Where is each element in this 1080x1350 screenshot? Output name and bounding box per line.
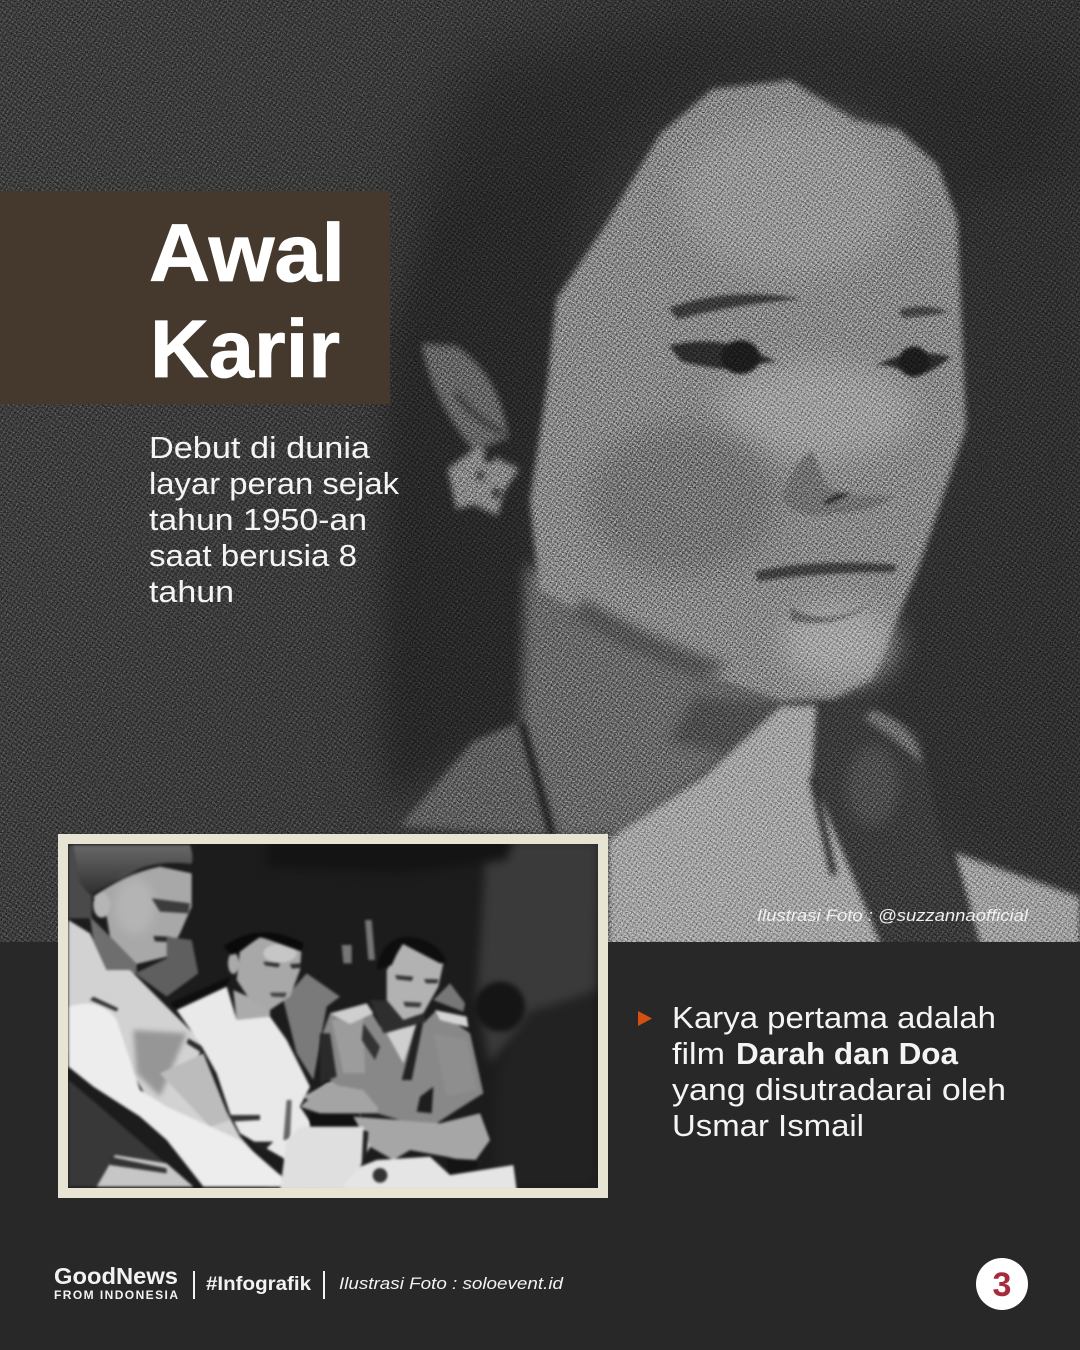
man on the left <box>68 845 300 1187</box>
bullet point: Usmar Ismail <box>672 1108 864 1143</box>
face <box>530 80 966 702</box>
hashtag: #Infografik <box>206 1274 311 1295</box>
man in the middle <box>172 932 340 1160</box>
intro text: tahun <box>149 574 234 609</box>
facial features <box>669 294 951 623</box>
page number badge <box>976 1258 1028 1310</box>
bottom dark panel <box>0 942 1080 1350</box>
halftone grain texture <box>0 0 1080 942</box>
footer <box>54 1263 564 1302</box>
left part of still <box>68 845 360 1187</box>
bullet point: Karya pertama adalah <box>672 1000 996 1035</box>
bullet point <box>638 1000 1006 1143</box>
papers on the table <box>280 1127 517 1190</box>
photo credit: Ilustrasi Foto : soloevent.id <box>339 1274 564 1293</box>
bullet point: Darah dan Doa <box>736 1036 959 1071</box>
portrait photo background <box>0 0 1080 946</box>
logo <box>54 1263 178 1302</box>
logo: FROM INDONESIA <box>54 1288 178 1302</box>
bullet point: yang disutradarai oleh <box>672 1072 1006 1107</box>
intro text: tahun 1950-an <box>149 502 367 537</box>
still background <box>274 844 598 1060</box>
title text <box>149 208 345 395</box>
collar and shirt <box>400 705 1080 946</box>
ear and earring <box>422 344 519 516</box>
hair mass <box>395 10 1080 780</box>
framed film still <box>58 834 608 1198</box>
portrait photo credit: Ilustrasi Foto : @suzzannaofficial <box>757 906 1029 925</box>
intro text: Debut di dunia <box>149 430 371 465</box>
face shading <box>678 116 903 277</box>
right part of still <box>280 920 525 1190</box>
dark hair behind neck <box>380 235 558 802</box>
neck <box>521 562 782 839</box>
intro text: saat berusia 8 <box>149 538 357 573</box>
title text: Awal <box>149 208 345 299</box>
title text: Karir <box>150 304 340 395</box>
bullet point: film <box>672 1036 725 1071</box>
intro text <box>149 430 400 609</box>
title block <box>0 191 390 404</box>
man on the right <box>300 937 490 1163</box>
intro text: layar peran sejak <box>149 466 400 501</box>
right background <box>900 235 1067 810</box>
page number badge: 3 <box>993 1266 1011 1304</box>
logo: GoodNews <box>54 1263 178 1289</box>
icon: orange triangle bullet <box>638 1011 652 1026</box>
